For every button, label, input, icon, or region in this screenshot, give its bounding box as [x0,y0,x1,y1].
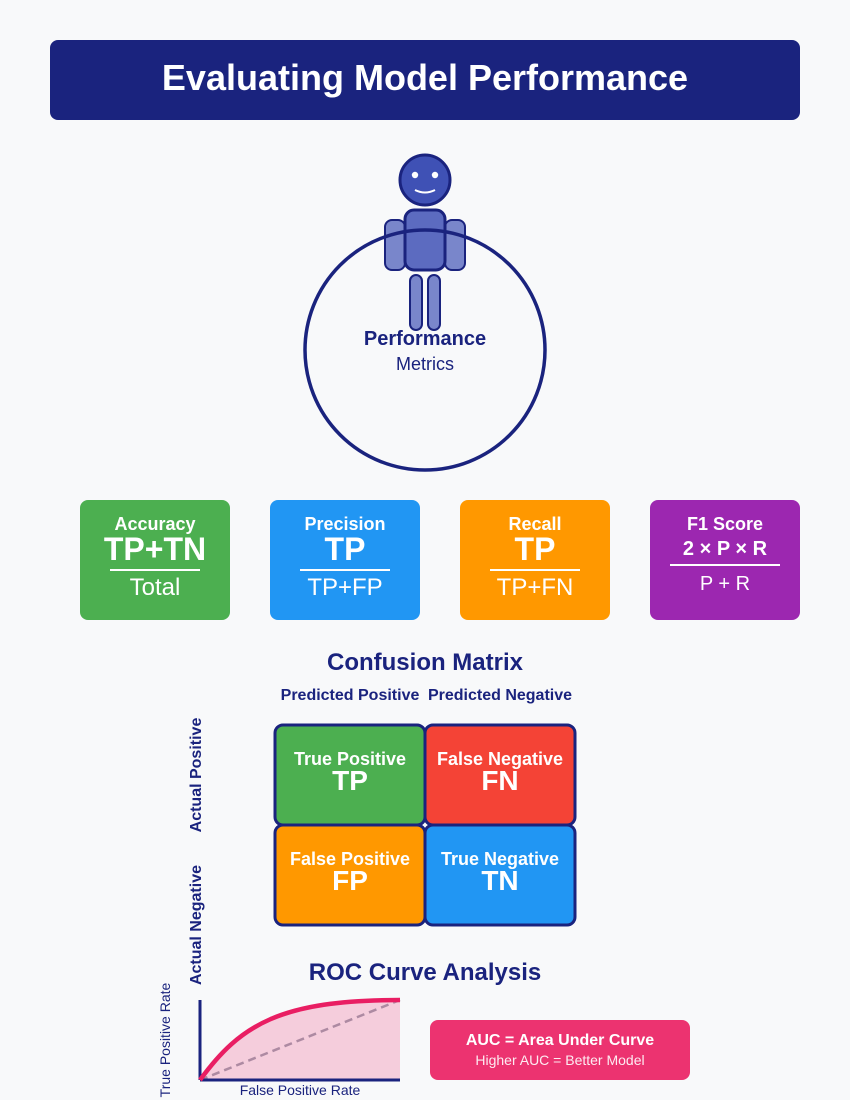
panel: accuracy: TP+TN [104,531,206,567]
panel: accuracy: Total [130,574,180,601]
axis label: false positive rate: False Positive Rate [240,1082,361,1098]
heading: confusion matrix: Confusion Matrix [327,649,524,676]
label: predicted positive: Predicted Positive [281,687,419,704]
panel: f1 score: P + R [700,573,750,595]
cell: false positive: False Positive [290,849,410,869]
panel: recall [460,500,610,620]
performance metrics circle: Performance [364,328,486,350]
panel: f1 score: 2 × P × R [683,538,768,560]
performance metrics circle: Metrics [396,354,454,374]
panel: accuracy: Accuracy [114,514,196,534]
panel: recall: TP [515,531,555,567]
icon: person figure [385,155,465,330]
cell: false negative: FN [481,765,519,796]
callout: auc: Higher AUC = Better Model [475,1052,645,1068]
title banner: Evaluating Model Performance [162,57,688,98]
callout: auc [430,1020,690,1080]
cell: false negative: False Negative [437,749,563,769]
panel: precision: TP+FP [307,574,383,601]
panel: precision: TP [325,531,365,567]
performance metrics circle [305,230,545,470]
panel: f1 score [650,500,800,620]
panel: f1 score: F1 Score [687,514,763,534]
chart: roc curve [200,1000,400,1080]
title banner [50,40,800,120]
cell: true positive: TP [332,765,368,796]
heading: roc curve analysis: ROC Curve Analysis [309,959,541,986]
cell: true positive: True Positive [294,749,406,769]
cell: true negative: TN [481,865,519,896]
cell: true negative [425,825,575,925]
cell: false positive: FP [332,865,368,896]
axis label: true positive rate: True Positive Rate [157,982,173,1097]
panel: recall: Recall [508,514,562,534]
panel: precision: Precision [304,514,386,534]
panel: recall: TP+FN [497,574,573,601]
callout: auc: AUC = Area Under Curve [466,1032,654,1049]
cell: true positive [275,725,425,825]
cell: false positive [275,825,425,925]
label: actual negative: Actual Negative [188,865,205,985]
cell: false negative [425,725,575,825]
label: actual positive: Actual Positive [188,718,205,832]
label: predicted negative: Predicted Negative [428,687,572,704]
panel: precision [270,500,420,620]
cell: true negative: True Negative [441,849,559,869]
panel: accuracy [80,500,230,620]
